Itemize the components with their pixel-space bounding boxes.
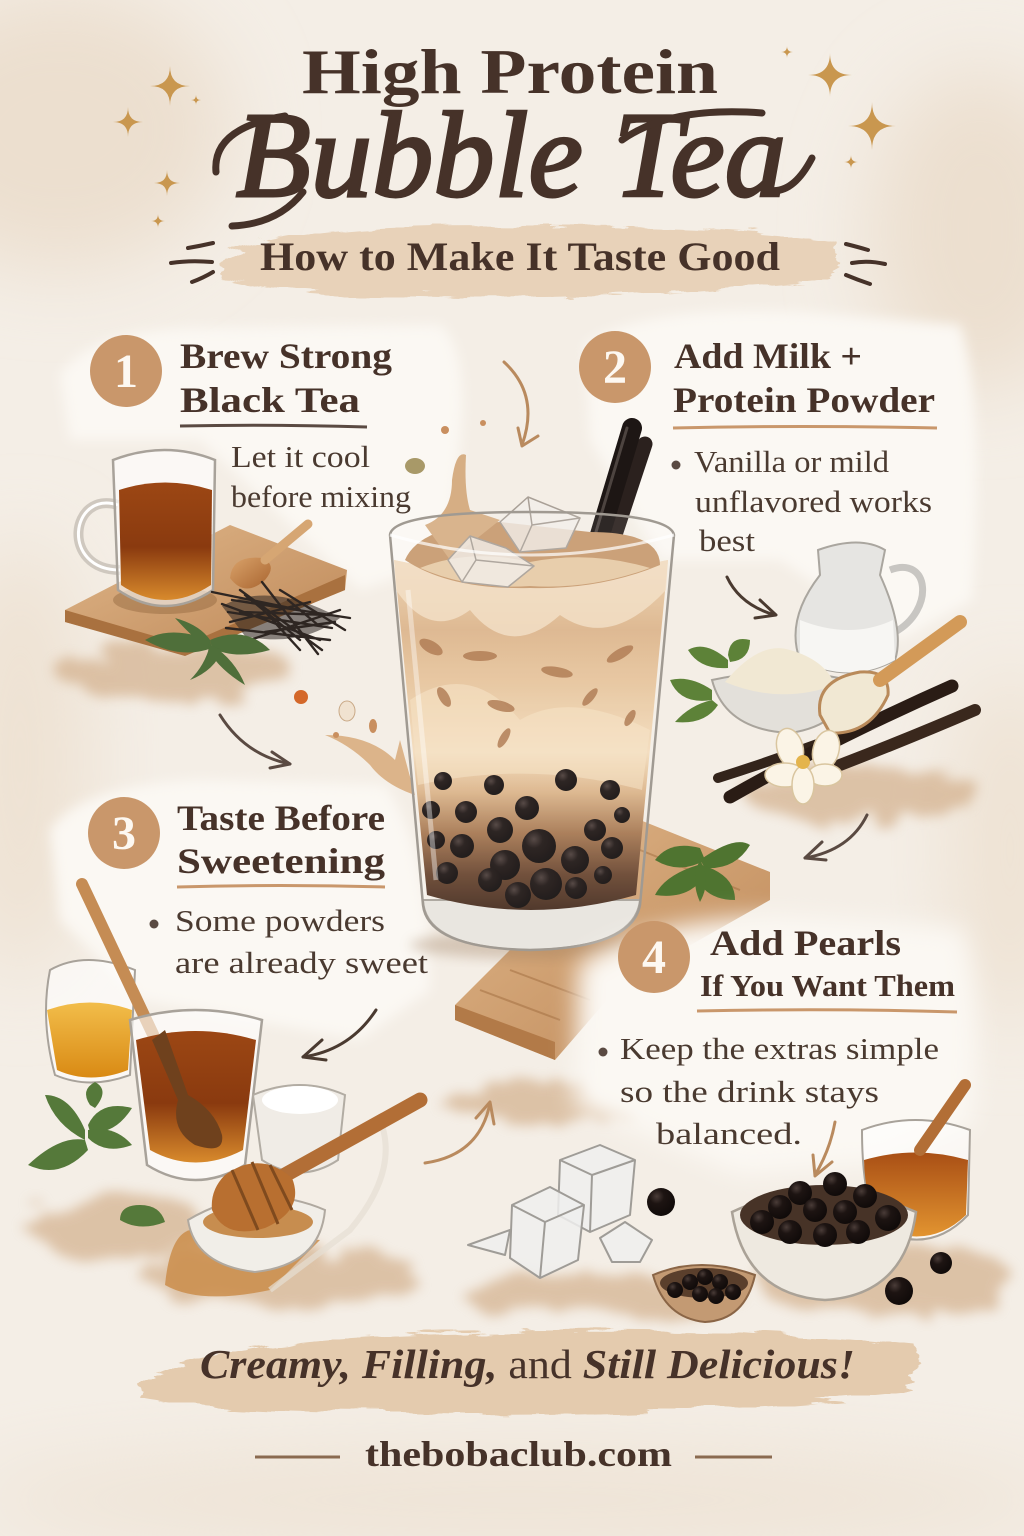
illustration: ice, pearls bowls, syrup jar (468, 1085, 970, 1322)
illustration: tea glass, honey, dipper, sugar, mint (28, 884, 420, 1296)
panel background: step 4 (575, 916, 977, 1175)
step 1 heading: Brew Strong (180, 336, 392, 376)
step 4 text: balanced. (656, 1116, 802, 1151)
straws (590, 428, 645, 565)
arrow: step 1 to step 3 (220, 715, 290, 768)
step 3 panel (28, 797, 428, 1296)
wooden board (455, 820, 770, 1060)
step 1 heading (180, 336, 392, 427)
title: High Protein: High Protein (302, 36, 718, 107)
step 2 text: unflavored works (695, 484, 932, 519)
step 1 heading: Black Tea (180, 380, 360, 420)
step 2 heading: Protein Powder (673, 380, 935, 420)
step 3 heading: Taste Before (177, 798, 385, 838)
brush ticks (171, 243, 885, 284)
arrow: step 2 to step 4 (805, 815, 867, 860)
milk tea body (394, 560, 668, 910)
step 4 text: so the drink stays (620, 1074, 879, 1109)
arrow: step 3 text to glass (303, 1010, 376, 1060)
step 4 text: Keep the extras simple (620, 1031, 939, 1066)
illustration: milk jug, protein powder, vanilla (670, 542, 975, 804)
step 4 number badge: 4 (642, 931, 666, 984)
subtitle: How to Make It Taste Good (260, 234, 780, 279)
step 3 number badge (88, 797, 160, 869)
illustration: tea mug on board with leaves (65, 450, 350, 685)
sparkles (113, 46, 896, 228)
droplets (294, 420, 486, 738)
arrow: step 4 text to bowl (813, 1122, 835, 1176)
step 2 panel (579, 331, 975, 804)
step 3 text (150, 903, 428, 980)
step 1 text: before mixing (231, 479, 411, 514)
step 3 heading: Sweetening (177, 841, 385, 881)
bottom banner (140, 1331, 918, 1414)
step 2 heading (673, 336, 937, 428)
step 2 text: Vanilla or mild (694, 444, 890, 479)
step 1 text: Let it cool (231, 439, 370, 474)
glass base (423, 900, 640, 950)
step 3 number badge: 3 (112, 807, 136, 860)
arrow: step 3 to step 4 (425, 1102, 494, 1163)
step 2 text (672, 444, 932, 558)
step 2 text: best (699, 523, 755, 558)
step 4 panel (468, 921, 970, 1322)
milk splash left (325, 735, 415, 795)
title: Bubble Tea: Bubble Tea (236, 88, 786, 223)
step 4 number badge (618, 921, 690, 993)
step 1 panel (65, 335, 411, 685)
step 3 heading (177, 798, 385, 887)
splash top (425, 454, 500, 560)
ice cubes (448, 497, 580, 587)
panel backgrounds (50, 311, 976, 1040)
step 2 heading: Add Milk + (674, 336, 862, 376)
tagline: Creamy, Filling, and Still Delicious! (200, 1341, 855, 1387)
footer website: thebobaclub.com (365, 1434, 672, 1474)
step 1 number badge: 1 (114, 345, 138, 398)
arrow: step 1 to center (504, 362, 538, 446)
central bubble tea drink (294, 420, 770, 1060)
foam top (405, 522, 660, 588)
arrow: step 2 text to jug (727, 577, 776, 618)
watercolor washes (25, 644, 1015, 1316)
mint on board (655, 842, 750, 902)
step 1 number badge (90, 335, 162, 407)
step 2 number badge: 2 (603, 341, 627, 394)
glass outline (390, 512, 674, 950)
step 4 heading (697, 923, 957, 1012)
step 2 number badge (579, 331, 651, 403)
subtitle banner (222, 225, 839, 297)
step 4 heading: If You Want Them (700, 968, 955, 1003)
tea swirl specks (417, 635, 638, 750)
step 4 text (598, 1031, 939, 1151)
step 3 text: are already sweet (175, 945, 428, 980)
step 4 heading: Add Pearls (710, 923, 901, 963)
step 3 text: Some powders (175, 903, 385, 938)
arrows between steps (220, 362, 867, 1176)
step 1 text (231, 439, 411, 514)
tapioca pearls (422, 769, 630, 908)
glass shadow (410, 931, 650, 959)
